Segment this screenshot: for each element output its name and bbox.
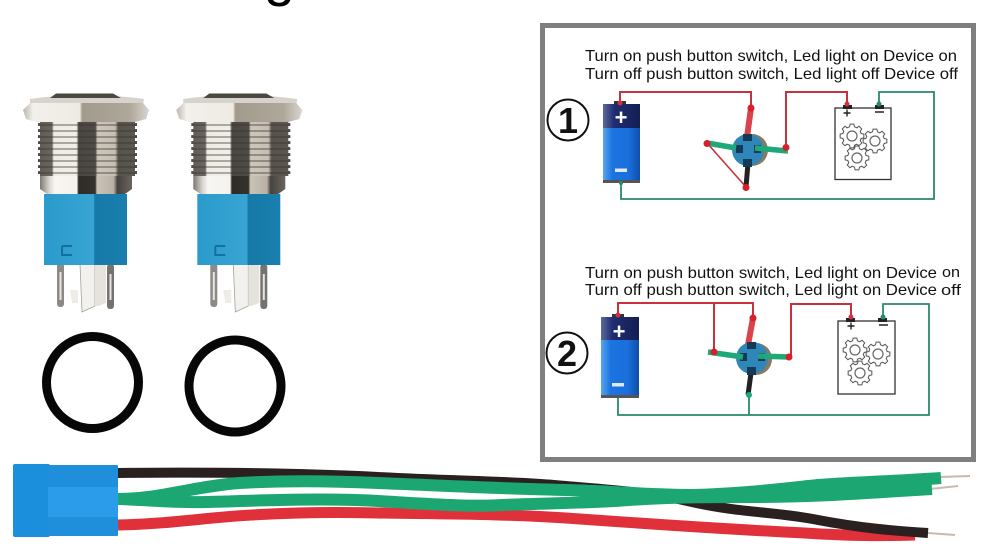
bare wire tips	[928, 476, 970, 535]
blue connector	[13, 464, 118, 537]
diagram 1 device with gears	[835, 102, 891, 180]
diagram 2 caption: Turn on push button switch, Led light on Device	[585, 265, 937, 282]
diagram 2 number badge	[546, 332, 588, 374]
diagram 2 switch with leads	[708, 314, 792, 398]
diagram 2 caption	[585, 264, 962, 299]
diagram 1 caption: Turn on push button switch, Led light on Device on	[585, 48, 957, 65]
photo: wire harness with blue connector	[13, 464, 970, 537]
panel: wiring diagrams	[542, 26, 974, 460]
diagram 2 battery	[601, 312, 639, 398]
diagram 2 caption: on	[942, 264, 960, 281]
diagram 1 wiring	[620, 92, 934, 199]
diagram 1 caption	[585, 48, 959, 83]
diagram 1 number badge	[548, 100, 588, 141]
photo: metal push button switch right	[176, 94, 302, 312]
diagram 1 battery: +	[615, 105, 627, 130]
black O-ring left	[46, 336, 138, 428]
black O-ring right	[189, 340, 281, 432]
photo: metal push button switch left	[23, 94, 149, 312]
red wire	[118, 512, 915, 536]
diagram 2 caption: off	[941, 282, 962, 299]
diagram 1 battery	[603, 100, 640, 185]
diagram 2 caption: Turn off push button switch, Led light on Device	[585, 282, 937, 299]
diagram 1 switch with leads	[704, 104, 790, 191]
black wire	[118, 473, 928, 533]
diagram 2 device with gears	[838, 314, 895, 394]
diagram 1 caption: Turn off push button switch, Led light off Device off	[585, 66, 959, 83]
diagram 2 number badge: 2	[557, 333, 577, 374]
diagram 2 battery: +	[613, 319, 625, 344]
green wire lower	[118, 489, 932, 506]
diagram 1 number badge: 1	[558, 100, 578, 141]
diagram 2 wiring	[618, 303, 929, 415]
green wire upper	[118, 478, 941, 499]
